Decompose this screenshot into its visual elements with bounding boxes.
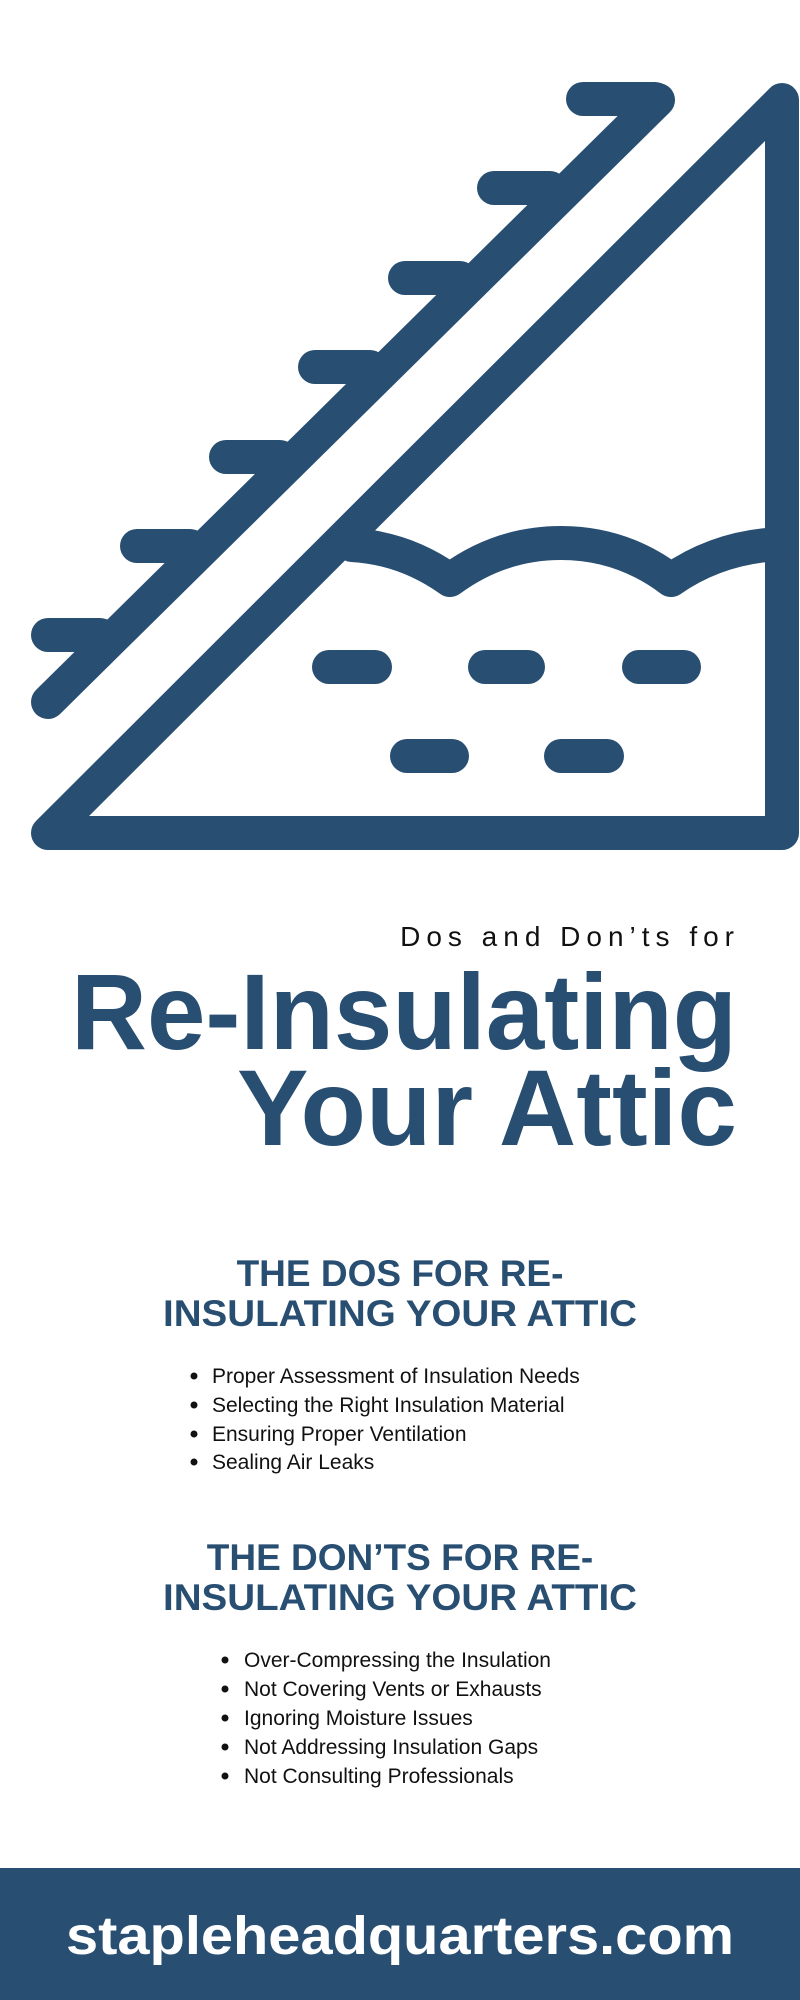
list: dos: Sealing Air Leaks	[212, 1451, 374, 1474]
list: don'ts: Not Consulting Professionals	[244, 1765, 514, 1788]
list: don'ts: Not Covering Vents or Exhausts	[244, 1678, 542, 1701]
footer url: stapleheadquarters.com	[66, 1906, 734, 1966]
heading: dos: THE DOS FOR RE-	[237, 1253, 563, 1294]
heading: don'ts	[163, 1537, 637, 1618]
list: dos: Selecting the Right Insulation Material	[212, 1394, 565, 1417]
footer band	[0, 1868, 800, 2000]
icon: insulation dashes	[329, 667, 684, 756]
heading: don'ts: INSULATING YOUR ATTIC	[163, 1577, 637, 1618]
title: Re-Insulating	[71, 951, 737, 1072]
icon: attic triangle	[48, 100, 782, 833]
heading: dos: INSULATING YOUR ATTIC	[163, 1293, 637, 1334]
heading: dos	[163, 1253, 637, 1334]
icon: insulation cloud line	[352, 543, 782, 580]
icon: attic insulation	[48, 99, 782, 833]
list: dos: Ensuring Proper Ventilation	[212, 1423, 466, 1446]
icon: roof rafter with shingle tabs	[48, 99, 658, 702]
list: dos: Proper Assessment of Insulation Needs	[212, 1365, 580, 1388]
list: don'ts: Over-Compressing the Insulation	[244, 1649, 551, 1672]
title	[71, 951, 737, 1168]
list: dos	[190, 1365, 580, 1474]
heading: don'ts: THE DON’TS FOR RE-	[207, 1537, 593, 1578]
title: Your Attic	[237, 1047, 737, 1168]
list: don'ts: Ignoring Moisture Issues	[244, 1707, 473, 1730]
list: don'ts: Not Addressing Insulation Gaps	[244, 1736, 538, 1759]
subtitle: Dos and Don’ts for	[400, 921, 740, 952]
list: don'ts	[222, 1649, 551, 1788]
